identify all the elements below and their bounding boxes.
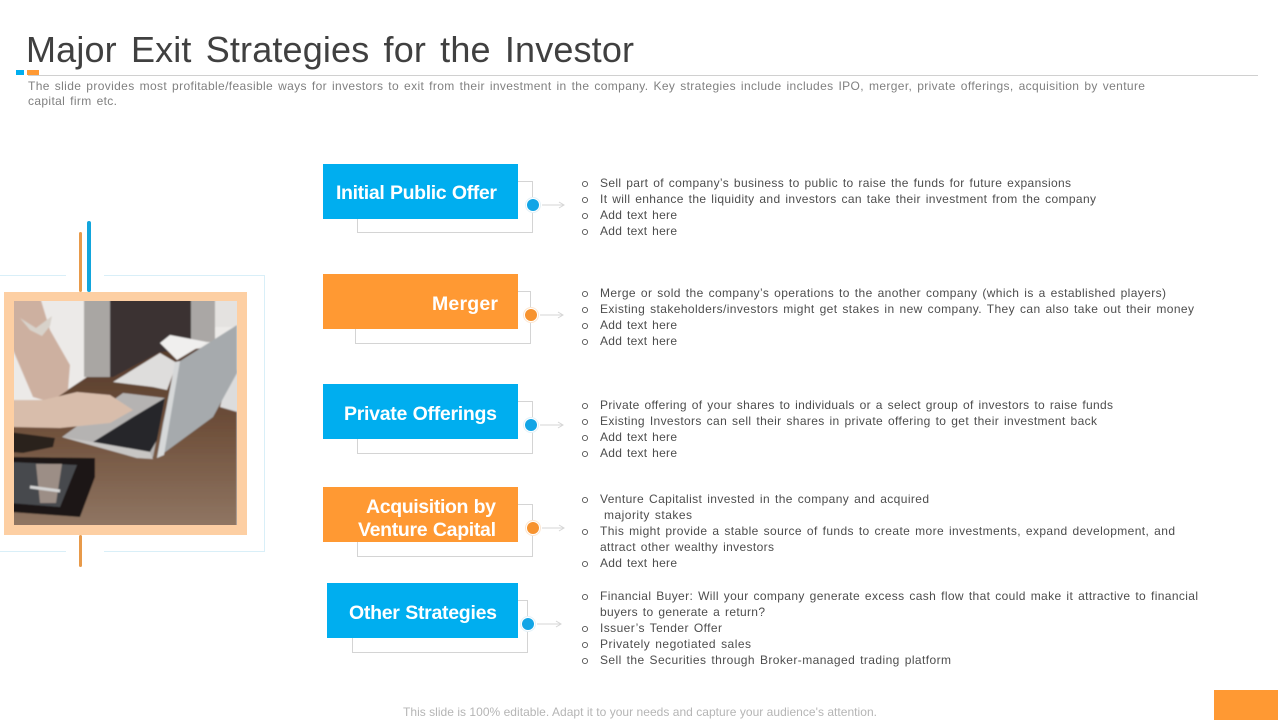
- arrow: [542, 202, 564, 208]
- heading label: Private Offerings: [344, 403, 497, 425]
- bullet list: Add text here: [600, 208, 677, 222]
- bullet list: [582, 589, 1198, 667]
- title: Major Exit Strategies for the Investor: [26, 29, 634, 70]
- bullet list: Financial Buyer: Will your company generate excess cash flow that could make it attractive to financial: [600, 589, 1198, 603]
- photo: hands on laptop: [10, 297, 241, 530]
- bullet list: Issuer’s Tender Offer: [600, 621, 722, 635]
- heading label: [358, 496, 496, 541]
- bullet list: attract other wealthy investors: [600, 540, 774, 554]
- arrow: [542, 525, 564, 531]
- bullet list: [582, 398, 1113, 460]
- description text: capital firm etc.: [28, 94, 117, 108]
- footer note: This slide is 100% editable. Adapt it to your needs and capture your audience's attention.: [403, 705, 877, 719]
- node dot: [524, 418, 538, 432]
- bullet list: Sell part of company’s business to public to raise the funds for future expansions: [600, 176, 1071, 190]
- bullet list: Add text here: [600, 556, 677, 570]
- bullet list: Existing Investors can sell their shares in private offering to get their investment back: [600, 414, 1098, 428]
- arrow: [537, 621, 561, 627]
- connector bracket: [358, 402, 532, 454]
- bullet list: [582, 286, 1194, 348]
- bullet list: buyers to generate a return?: [600, 605, 765, 619]
- node dot: [526, 520, 540, 536]
- heading label: Initial Public Offer: [336, 182, 497, 204]
- bullet list: [582, 176, 1096, 238]
- thin frame outline: [0, 276, 264, 552]
- arrow: [540, 312, 563, 318]
- bullet list: It will enhance the liquidity and investors can take their investment from the company: [600, 192, 1096, 206]
- bullet list: Add text here: [600, 224, 677, 238]
- title rule with accent marks: [16, 70, 1258, 76]
- connector bracket: [352, 600, 528, 652]
- bullet list: Merge or sold the company’s operations to the another company (which is a established players): [600, 286, 1166, 300]
- heading label: Venture Capital: [358, 519, 496, 541]
- bullet list: Sell the Securities through Broker-managed trading platform: [600, 653, 951, 667]
- accent line: orange bottom: [79, 535, 82, 567]
- strategy: Acquisition by Venture Capital: [323, 487, 1175, 570]
- bullet list: Add text here: [600, 430, 677, 444]
- node dot: [526, 198, 540, 212]
- arrow: [540, 422, 563, 428]
- heading label: Other Strategies: [349, 602, 497, 624]
- accent line: blue: [87, 221, 91, 292]
- bullet list: Add text here: [600, 334, 677, 348]
- strategy: Private Offerings: [323, 384, 1113, 460]
- bullet list: This might provide a stable source of funds to create more investments, expand development, and: [600, 524, 1175, 538]
- heading label: Merger: [432, 293, 498, 315]
- strategy: Merger: [323, 274, 1194, 348]
- heading box: [323, 487, 518, 542]
- strategy: Initial Public Offer: [323, 164, 1096, 238]
- heading label: Acquisition by: [366, 496, 496, 518]
- connector bracket: [358, 504, 532, 556]
- description text: [28, 79, 1145, 108]
- connector bracket: [358, 182, 532, 232]
- bullet list: Add text here: [600, 446, 677, 460]
- description text: The slide provides most profitable/feasible ways for investors to exit from their investment in the company. Key strategies include includes IPO, merger, private offerings, acquisition by venture: [28, 79, 1145, 93]
- heading box: [323, 274, 518, 329]
- heading box: [323, 164, 518, 219]
- heading box: [323, 384, 518, 439]
- bullet list: Privately negotiated sales: [600, 637, 751, 651]
- node dot: [520, 616, 536, 632]
- node dot: [524, 308, 538, 322]
- bullet list: Venture Capitalist invested in the company and acquired: [600, 492, 929, 506]
- bullet list: Add text here: [600, 318, 677, 332]
- accent line: orange top: [79, 232, 82, 292]
- heading box: [327, 583, 518, 638]
- strategy: Other Strategies: [327, 583, 1198, 667]
- bullet list: majority stakes: [604, 508, 692, 522]
- bullet list: Existing stakeholders/investors might get stakes in new company. They can also take out their money: [600, 302, 1194, 316]
- photo panel: [0, 221, 264, 567]
- bullet list: [582, 492, 1175, 570]
- corner page-number block: [1214, 690, 1278, 720]
- bullet list: Private offering of your shares to individuals or a select group of investors to raise funds: [600, 398, 1113, 412]
- connector bracket: [356, 292, 530, 344]
- photo frame: [4, 292, 247, 535]
